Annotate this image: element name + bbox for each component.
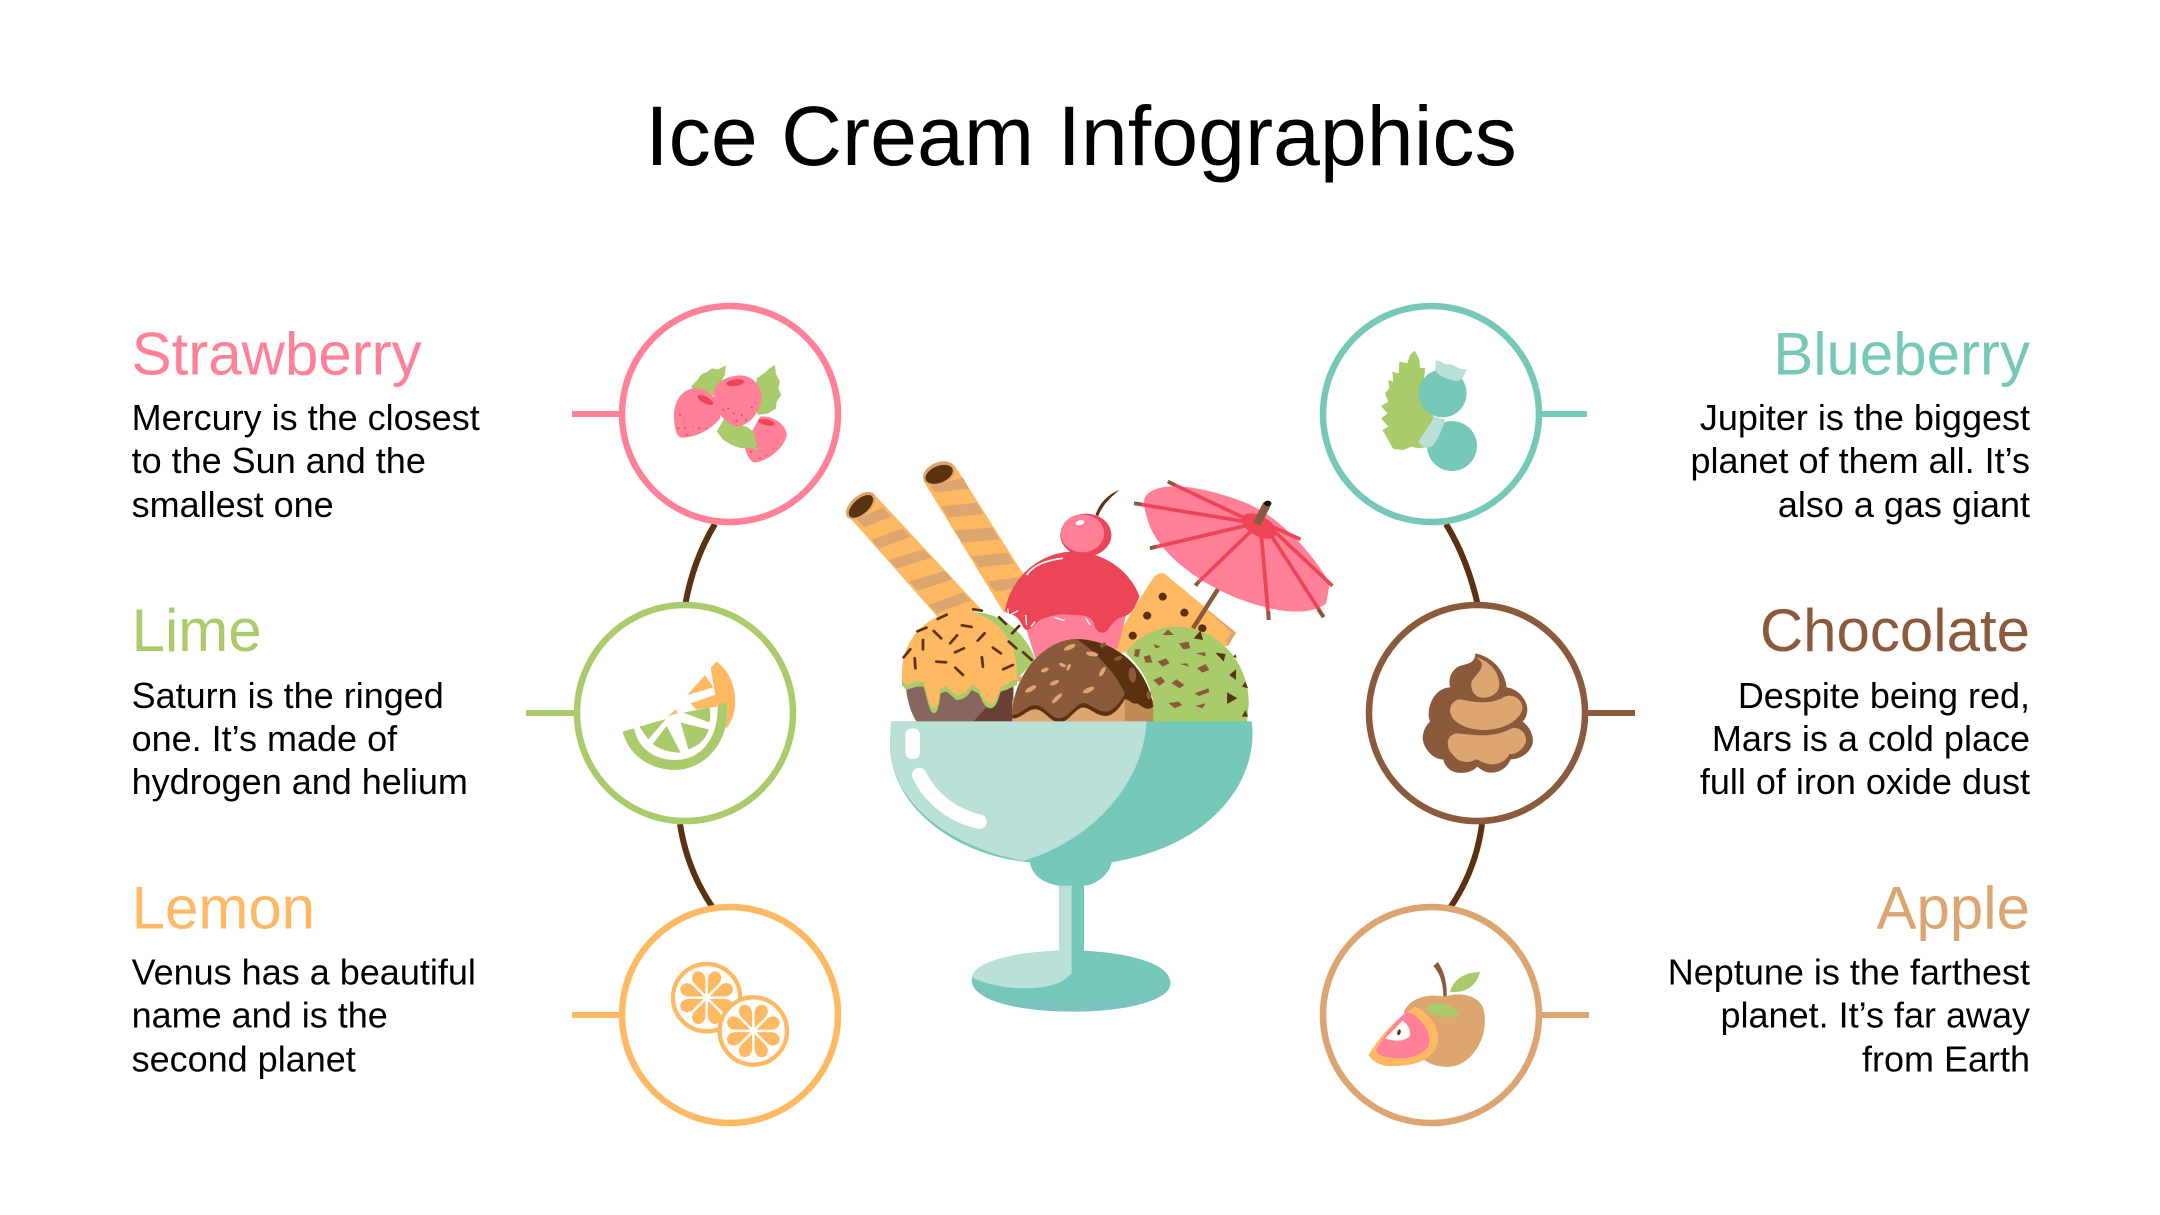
text: chocolate: Mars is a cold place bbox=[1712, 718, 2030, 759]
illustration: ice cream sundae bbox=[841, 457, 1332, 1012]
heading: strawberry: Strawberry bbox=[132, 320, 422, 388]
panel: lemon bbox=[132, 874, 838, 1123]
icon: strawberries bbox=[674, 365, 787, 463]
stem highlight bbox=[972, 886, 1072, 988]
text: apple: from Earth bbox=[1862, 1038, 2030, 1080]
text: lemon: second planet bbox=[132, 1038, 356, 1080]
heading: lime: Lime bbox=[132, 597, 262, 664]
circle bbox=[577, 605, 793, 821]
text: chocolate: Despite being red, bbox=[1738, 675, 2030, 716]
toppings and scoops bbox=[841, 457, 1332, 723]
circle bbox=[1369, 605, 1585, 821]
text: strawberry: smallest one bbox=[132, 484, 334, 525]
panel: strawberry bbox=[132, 306, 838, 525]
connector stub bbox=[1541, 1012, 1589, 1018]
wafer right bbox=[919, 457, 1025, 613]
foot rim bbox=[973, 985, 1170, 1012]
heading: apple: Apple bbox=[1877, 874, 2030, 942]
panel: blueberry bbox=[1323, 306, 2030, 525]
bowl body and stem bbox=[890, 721, 1253, 1012]
text: blueberry: planet of them all. It’s bbox=[1690, 440, 2030, 481]
text: lemon: name and is the bbox=[132, 994, 388, 1036]
bowl bbox=[890, 721, 1253, 1012]
text: lime: one. It’s made of bbox=[132, 718, 398, 759]
circle bbox=[1323, 907, 1539, 1123]
connectors between left circles bbox=[680, 524, 715, 908]
circle bbox=[1323, 306, 1539, 522]
wafer left bbox=[841, 487, 982, 618]
panel: lime bbox=[132, 597, 793, 821]
heading: chocolate: Chocolate bbox=[1760, 597, 2030, 664]
panel: chocolate bbox=[1369, 597, 2030, 821]
green chip scoop bbox=[1126, 627, 1249, 722]
text: lime: Saturn is the ringed bbox=[132, 675, 444, 716]
cookie bbox=[1113, 573, 1236, 653]
text: strawberry: Mercury is the closest bbox=[132, 397, 480, 438]
connector stub bbox=[572, 1012, 621, 1018]
icon: lime slice bbox=[623, 661, 735, 770]
text: lemon: Venus has a beautiful bbox=[132, 952, 476, 992]
connector stub bbox=[1540, 411, 1587, 417]
panel: apple bbox=[1323, 874, 2030, 1123]
white shine marks bbox=[905, 728, 979, 822]
text: strawberry: to the Sun and the bbox=[132, 440, 426, 481]
cherry bbox=[1060, 490, 1120, 556]
icon: apple bbox=[1368, 962, 1485, 1067]
connector stub bbox=[526, 710, 576, 716]
circle bbox=[622, 907, 838, 1123]
heading: blueberry: Blueberry bbox=[1773, 320, 2030, 388]
green scoop behind bbox=[965, 612, 1035, 680]
umbrella bbox=[1134, 482, 1332, 628]
connectors between right circles bbox=[1446, 524, 1482, 908]
title: Ice Cream Infographics bbox=[645, 89, 1517, 183]
bowl glass highlight bbox=[890, 721, 1147, 861]
icon: chocolate swirl bbox=[1423, 653, 1533, 773]
orange scoop bbox=[902, 609, 1032, 722]
pink scoop with red syrup bbox=[1005, 552, 1140, 658]
text: blueberry: also a gas giant bbox=[1778, 484, 2030, 525]
text: apple: planet. It’s far away bbox=[1720, 994, 2030, 1036]
icon: blueberries and leaf bbox=[1381, 351, 1477, 471]
heading: lemon: Lemon bbox=[132, 874, 315, 942]
icon: lemon slices bbox=[673, 964, 787, 1065]
text: apple: Neptune is the farthest bbox=[1668, 952, 2030, 992]
circle bbox=[622, 306, 838, 522]
text: lime: hydrogen and helium bbox=[132, 761, 468, 802]
chocolate scoop bbox=[1012, 639, 1153, 723]
connector stub bbox=[1587, 710, 1635, 716]
text: chocolate: full of iron oxide dust bbox=[1700, 761, 2030, 802]
connector stub bbox=[572, 411, 621, 417]
text: blueberry: Jupiter is the biggest bbox=[1700, 397, 2030, 438]
